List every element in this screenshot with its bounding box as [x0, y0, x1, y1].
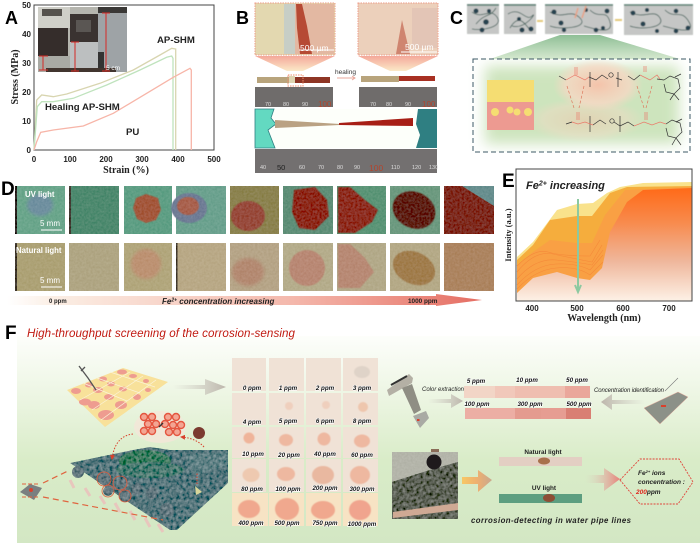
result hexagon: Fe	[638, 470, 646, 477]
axis tick labels: 30	[22, 59, 32, 68]
inset photo: tensile test	[38, 7, 127, 72]
result hexagon	[620, 459, 693, 504]
axis tick labels	[22, 1, 32, 155]
color card strip 5-50 ppm: 5 ppm	[467, 378, 486, 385]
sample grid with ppm labels: 500 ppm	[274, 520, 300, 527]
axis titles: Strain (%)	[103, 165, 149, 176]
concentration gradient arrow: concentration increasing	[177, 297, 275, 306]
color card strip 5-50 ppm	[464, 377, 590, 398]
panel label F: F	[5, 323, 17, 344]
tick labels	[525, 304, 676, 313]
polymer network blocks	[467, 4, 693, 35]
panel label A: A	[5, 8, 18, 28]
panel: A stress-strain chart: 0	[32, 155, 37, 164]
panel: A stress-strain chart: 100	[63, 155, 77, 164]
water pipe photo	[392, 449, 458, 519]
panel: A stress-strain chart: 200	[99, 155, 113, 164]
tick labels: 700	[662, 304, 676, 313]
pipette	[79, 366, 96, 390]
sample grid with ppm labels: 300 ppm	[349, 486, 375, 493]
rulers: 90	[302, 102, 308, 108]
sample grid with ppm labels: 20 ppm	[277, 452, 300, 459]
bottom ruler: 120	[412, 165, 421, 171]
test strip	[644, 378, 688, 424]
curve labels: PU	[126, 127, 139, 138]
spectra area fills	[517, 182, 692, 301]
micrograph after healing	[358, 3, 438, 55]
natural light tiles	[15, 243, 494, 292]
sample grid with ppm labels: 1 ppm	[279, 385, 298, 392]
sample grid with ppm labels: 6 ppm	[316, 418, 335, 425]
bottom ruler: 40	[260, 165, 266, 171]
axis tick labels: 40	[22, 30, 32, 39]
spectra frame background	[516, 169, 692, 301]
sample grid with ppm labels: 80 ppm	[241, 486, 263, 493]
bottom ruler: 100	[369, 163, 383, 173]
curve labels: AP-SHM	[157, 35, 195, 46]
rulers: 100	[422, 100, 436, 109]
tick labels: 400	[525, 304, 539, 313]
micrograph after healing: 500 µm	[405, 42, 434, 52]
increasing arrow	[575, 199, 581, 292]
panel title: High-throughput screening of the corrosion-sensing	[27, 327, 296, 340]
panel: B healing photographs	[236, 3, 438, 173]
rulers: 80	[386, 102, 392, 108]
panel label E: E	[502, 171, 515, 192]
color card strip 100-500 ppm: 500 ppm	[566, 401, 592, 408]
plot area	[34, 5, 214, 150]
axis tick labels: 50	[22, 1, 32, 10]
handheld colorimeter	[387, 374, 429, 428]
series title: 2+	[538, 180, 547, 188]
bottom ruler: 110	[391, 165, 400, 171]
sample grid with ppm labels: 8 ppm	[353, 418, 372, 425]
rulers	[255, 87, 437, 109]
color card strip 100-500 ppm: 300 ppm	[517, 401, 543, 408]
rulers: 100	[318, 100, 332, 109]
bottom ruler	[255, 149, 438, 173]
UV light strip: UV light	[532, 485, 557, 492]
concentration gradient arrow: 2+	[170, 298, 177, 304]
stress-strain curves	[34, 48, 191, 150]
bottom ruler: 70	[318, 165, 324, 171]
sample grid with ppm labels: 2 ppm	[315, 385, 335, 392]
hydrogen-bonded molecular structures	[559, 66, 682, 145]
iron sphere	[193, 427, 205, 439]
sample grid with ppm labels: 400 ppm	[237, 520, 264, 527]
concentration gradient arrow: Fe	[162, 297, 171, 306]
UV light strip	[499, 485, 582, 503]
sensor array plate	[67, 368, 168, 427]
result hexagon: 2+	[645, 469, 651, 474]
bottom ruler: 130	[429, 165, 438, 171]
fluorescent molecule	[134, 411, 186, 443]
color card strip 100-500 ppm: 100 ppm	[464, 401, 490, 408]
bottom ruler: 60	[299, 165, 305, 171]
UV light tiles	[15, 184, 494, 236]
panel label B: B	[236, 8, 249, 28]
color card strip 100-500 ppm	[464, 401, 592, 419]
scale bar: 5 mm	[40, 219, 60, 228]
natural light label: Natural light	[16, 246, 62, 255]
sample grid with ppm labels: 200 ppm	[311, 485, 338, 492]
curve labels: Healing AP-SHM	[45, 102, 120, 113]
panel: F high-throughput screening	[5, 323, 700, 543]
concentration gradient arrow	[7, 294, 482, 306]
zoom cone to mechanism box	[490, 35, 680, 59]
pipeline terrain map	[70, 447, 228, 532]
arrow left	[601, 394, 645, 410]
curve labels	[45, 35, 195, 138]
sample strips	[257, 75, 435, 86]
grey arrow to sample grid	[173, 379, 226, 395]
result hexagon: concentration :	[638, 479, 685, 486]
detail sensor patch with dashed callout	[20, 470, 163, 520]
healing arrow	[335, 69, 356, 80]
panel: A stress-strain chart: 300	[135, 155, 149, 164]
dashed leader arrows	[112, 434, 133, 459]
tick labels: 500	[570, 304, 584, 313]
micrograph before healing: 500 µm	[300, 43, 329, 53]
color card strip 5-50 ppm: 50 ppm	[566, 377, 588, 384]
concentration identification label: Concentration identification	[594, 388, 665, 394]
scale bar: 5 mm	[40, 276, 60, 285]
axis titles: Wavelength (nm)	[567, 313, 641, 324]
rulers: 80	[283, 102, 289, 108]
tick labels: 600	[616, 304, 630, 313]
UV light label: UV light	[25, 190, 55, 199]
sample grid with ppm labels: 4 ppm	[242, 419, 262, 426]
series title: increasing	[547, 180, 605, 192]
natural light row	[15, 243, 494, 292]
panel: D test strips under light	[1, 179, 494, 306]
axis tick labels: 0	[27, 146, 32, 155]
panel: A stress-strain chart: 400	[171, 155, 185, 164]
series title: Fe	[526, 180, 539, 192]
caption: water pipe lines: corrosion-detecting in water pipe lines	[471, 516, 632, 525]
result hexagon: 200ppm	[635, 489, 661, 496]
panel: A stress-strain chart: 500	[207, 155, 221, 164]
concentration gradient arrow: 0 ppm	[49, 299, 67, 305]
red arrow	[585, 468, 620, 491]
color card strip 5-50 ppm: 10 ppm	[516, 377, 538, 384]
mechanism box	[473, 59, 690, 152]
sample grid with ppm labels: 1000 ppm	[348, 521, 377, 528]
bottom ruler: 80	[337, 165, 343, 171]
interlocking interface illustration	[487, 80, 534, 130]
textured terrain	[70, 447, 228, 530]
sample grid with ppm labels: 5 ppm	[279, 418, 298, 425]
panel: E emission spectra: Intensity (a.u.)	[503, 208, 513, 262]
sample grid with ppm labels: 10 ppm	[242, 451, 264, 458]
color extraction label: Color extraction	[422, 387, 465, 393]
sample grid with ppm labels: 750 ppm	[312, 520, 338, 527]
panel: C self-healing mechanism	[450, 4, 693, 152]
sample grid with ppm labels: 100 ppm	[275, 486, 301, 493]
natural light strip: Natural light	[524, 449, 563, 456]
inset scale label: 5 cm	[106, 65, 120, 72]
panel: E emission spectra	[502, 169, 692, 324]
panel label D: D	[1, 179, 15, 200]
axis tick labels: 20	[22, 88, 32, 97]
panel background	[17, 336, 700, 543]
sample grid with ppm labels	[232, 358, 378, 528]
panel: A stress-strain chart	[5, 1, 221, 176]
rulers: 70	[370, 102, 376, 108]
rulers: 70	[265, 102, 271, 108]
sample grid with ppm labels: 40 ppm	[313, 451, 336, 458]
rulers: 90	[405, 102, 411, 108]
frame	[516, 169, 692, 301]
result hexagon: ions	[650, 470, 666, 477]
healing arrow: healing	[335, 69, 356, 76]
sample grid with ppm labels: 3 ppm	[353, 385, 372, 392]
micrograph before healing	[255, 3, 335, 55]
zoom cones	[255, 56, 335, 71]
sample grid with ppm labels: 0 ppm	[243, 385, 262, 392]
UV light row	[15, 184, 494, 236]
orange arrow	[462, 470, 492, 492]
panel: A stress-strain chart: Stress (MPa)	[10, 49, 21, 105]
arrow right	[428, 394, 463, 408]
natural light strip	[499, 449, 582, 466]
sample grid with ppm labels: 60 ppm	[351, 452, 373, 459]
bottom ruler: 90	[354, 165, 360, 171]
panel label C: C	[450, 8, 463, 28]
bottom ruler: 50	[277, 163, 285, 172]
axis tick labels: 10	[22, 117, 32, 126]
stretched sample between grips	[255, 109, 437, 148]
concentration gradient arrow: 1000 ppm	[408, 298, 438, 305]
